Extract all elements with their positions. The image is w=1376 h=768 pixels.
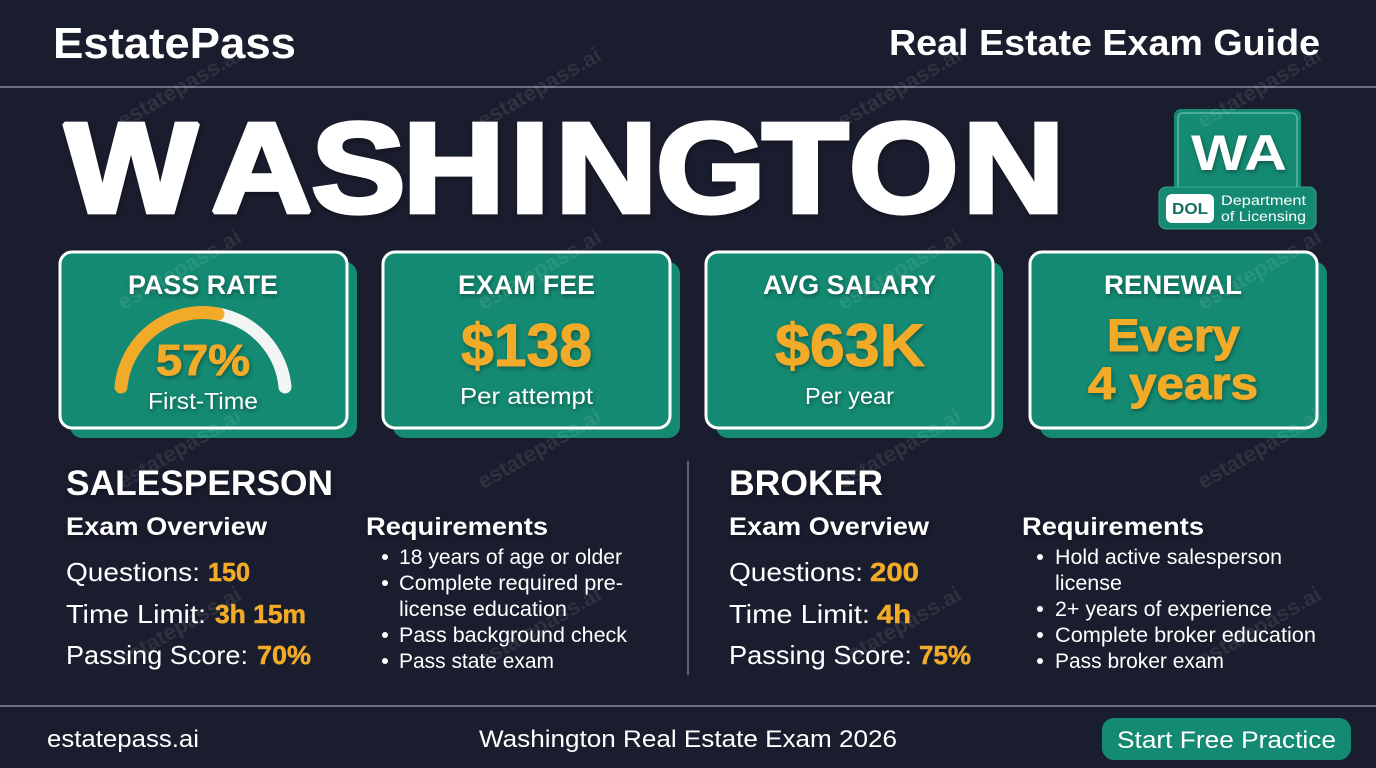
stat card: renewal: 4 years: [1088, 358, 1258, 409]
stat card: average salary: AVG SALARY: [763, 270, 936, 300]
salesperson section: [66, 464, 628, 673]
stat card: exam fee: Per attempt: [460, 383, 594, 409]
broker requirements: Pass broker exam: [1055, 650, 1224, 673]
stat card: renewal: RENEWAL: [1104, 270, 1242, 300]
broker exam overview: [729, 513, 971, 670]
stat card: pass rate: First-Time: [148, 388, 258, 414]
broker exam overview: Questions:: [729, 557, 863, 587]
watermarks: estatepass.ai: [833, 403, 965, 494]
broker exam overview: Exam Overview: [729, 513, 930, 541]
watermarks: estatepass.ai: [113, 42, 245, 133]
state badge: WA Department of Licensing: WA: [1191, 125, 1287, 181]
salesperson exam overview: 3h 15m: [215, 599, 306, 629]
stat card: exam fee: EXAM FEE: [458, 270, 595, 300]
salesperson exam overview: 150: [208, 557, 250, 587]
stat card: pass rate: 57%: [156, 336, 250, 385]
broker requirements: license: [1055, 572, 1122, 595]
salesperson exam overview: Questions:: [66, 557, 200, 587]
salesperson requirements: 18 years of age or older: [399, 546, 622, 569]
stat card: exam fee: $138: [461, 312, 592, 379]
stat card: average salary: Per year: [805, 383, 894, 409]
stat card: pass rate: [60, 252, 357, 438]
footer website: estatepass.ai: [47, 726, 199, 753]
watermarks: estatepass.ai: [1193, 403, 1325, 494]
state badge: WA Department of Licensing: [1159, 109, 1316, 229]
salesperson exam overview: Time Limit:: [66, 599, 206, 629]
watermarks: estatepass.ai: [1193, 581, 1325, 672]
stat card: renewal: [1030, 252, 1327, 438]
watermarks: estatepass.ai: [473, 42, 605, 133]
broker requirements: Requirements: [1022, 513, 1204, 541]
stat card: pass rate: PASS RATE: [128, 270, 278, 300]
salesperson requirements: [366, 513, 628, 673]
broker requirements: Hold active salesperson: [1055, 546, 1282, 569]
broker exam overview: 200: [870, 557, 919, 587]
watermarks: estatepass.ai: [1193, 42, 1325, 133]
salesperson exam overview: Passing Score:: [66, 640, 248, 670]
watermarks: estatepass.ai: [1193, 224, 1325, 315]
salesperson requirements: Pass background check: [399, 624, 628, 647]
salesperson heading: SALESPERSON: [66, 464, 333, 503]
watermarks: estatepass.ai: [833, 224, 965, 315]
broker requirements: Complete broker education: [1055, 624, 1316, 647]
salesperson exam overview: Exam Overview: [66, 513, 268, 541]
watermarks: estatepass.ai: [473, 403, 605, 494]
broker requirements: 2+ years of experience: [1055, 598, 1272, 621]
watermarks: estatepass.ai: [113, 581, 245, 672]
stat card: renewal: Every: [1107, 310, 1240, 361]
state badge: WA Department of Licensing: Department: [1221, 193, 1306, 208]
call to action button: [1102, 718, 1351, 760]
watermarks: estatepass.ai: [113, 403, 245, 494]
broker heading: BROKER: [729, 464, 883, 503]
call to action button: Start Free Practice: [1117, 727, 1336, 754]
salesperson requirements: Pass state exam: [399, 650, 554, 673]
header subtitle: Real Estate Exam Guide: [889, 22, 1320, 63]
salesperson requirements: Complete required pre-: [399, 572, 623, 595]
watermarks: [113, 42, 1325, 672]
stat card: average salary: [706, 252, 1003, 438]
broker exam overview: Time Limit:: [729, 599, 870, 629]
stat card: exam fee: [383, 252, 680, 438]
watermarks: estatepass.ai: [473, 224, 605, 315]
watermarks: estatepass.ai: [833, 581, 965, 672]
state badge: WA Department of Licensing: DOL: [1172, 201, 1208, 218]
salesperson exam overview: 70%: [257, 640, 311, 670]
salesperson requirements: license education: [399, 598, 567, 621]
broker exam overview: 75%: [919, 640, 971, 670]
broker exam overview: 4h: [877, 599, 911, 629]
title: WASHINGTON: WASHINGTON: [65, 96, 1064, 240]
watermarks: estatepass.ai: [833, 42, 965, 133]
watermarks: estatepass.ai: [473, 581, 605, 672]
broker exam overview: Passing Score:: [729, 640, 912, 670]
header brand: EstatePass: EstatePass: [53, 19, 296, 68]
broker section: [729, 464, 1316, 673]
salesperson exam overview: [66, 513, 311, 670]
state badge: WA Department of Licensing: of Licensing: [1221, 209, 1306, 224]
watermarks: estatepass.ai: [113, 224, 245, 315]
stat card: average salary: $63K: [775, 312, 925, 379]
broker requirements: [1022, 513, 1316, 673]
salesperson requirements: Requirements: [366, 513, 548, 541]
footer caption: Washington Real Estate Exam 2026: [479, 726, 897, 753]
